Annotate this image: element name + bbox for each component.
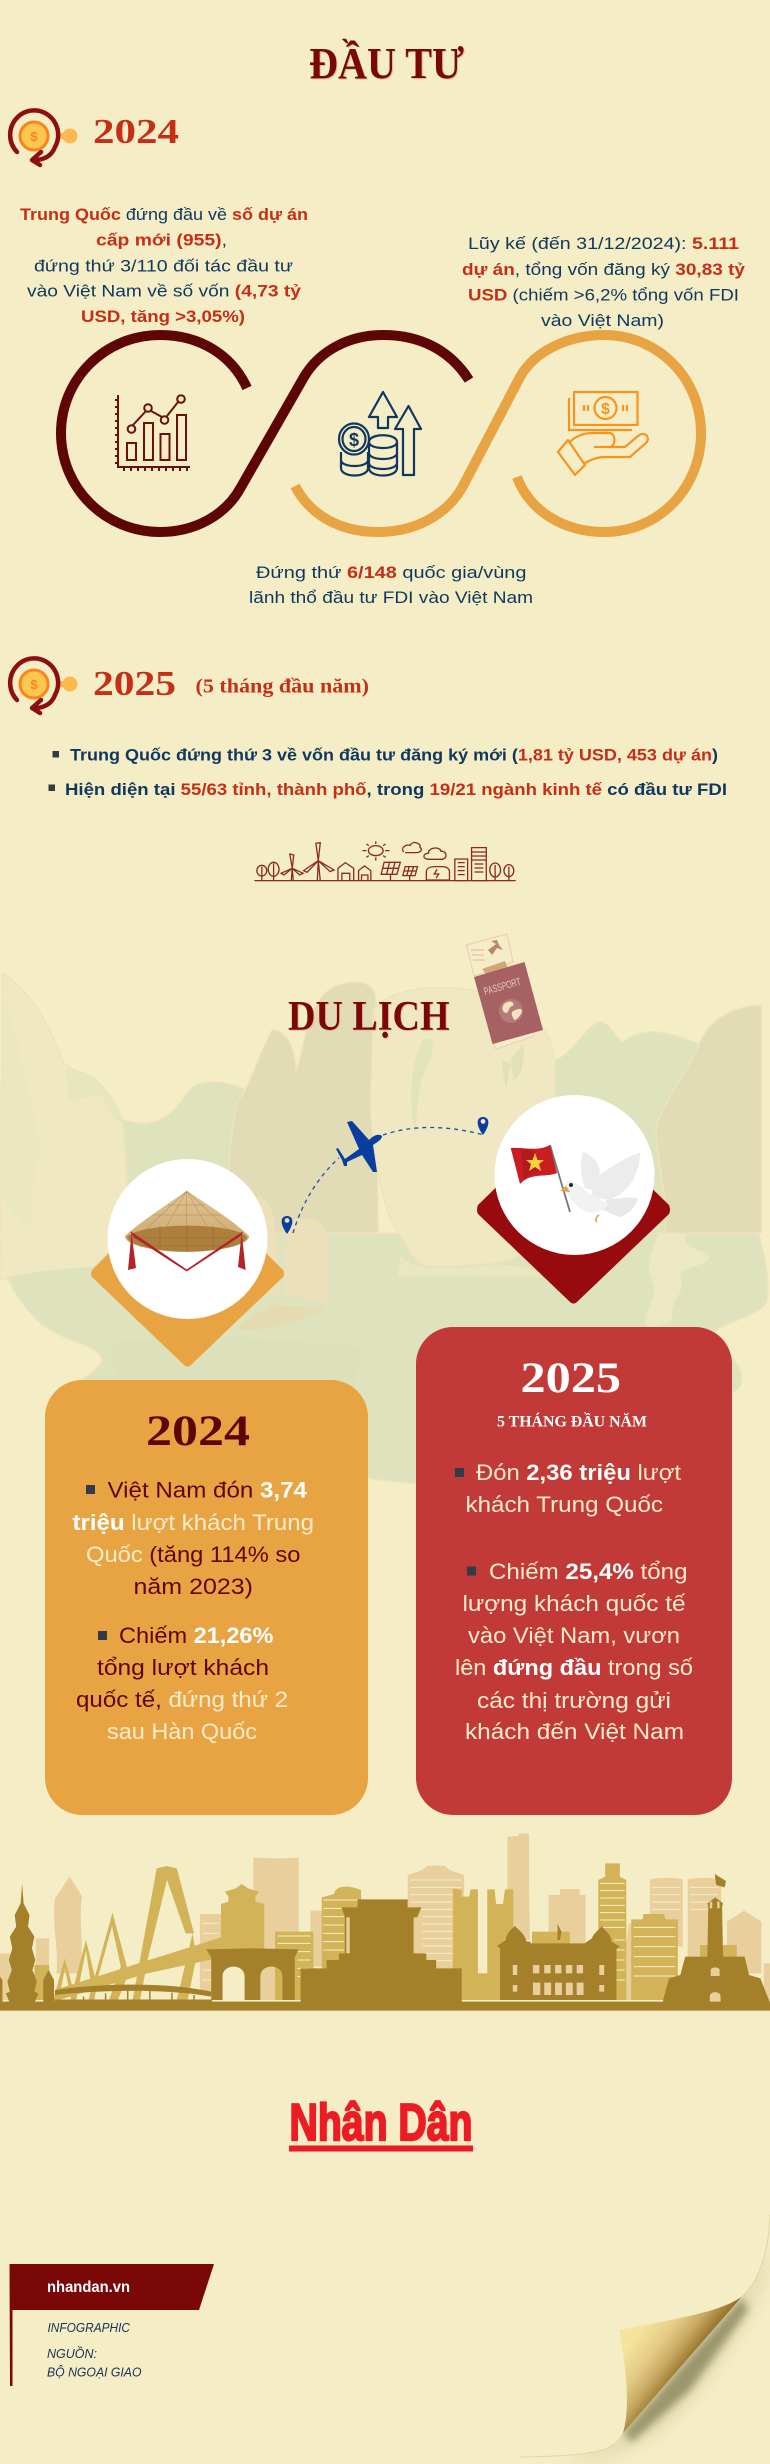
text: 3.74 million visitors: Quốc (tăng 114% so — [86, 1542, 300, 1567]
panel: 2024 tourism card — [45, 1380, 368, 1815]
icon: passport — [466, 934, 543, 1049]
bullet list: 2025 investment: Hiện diện tại 55/63 tỉnh, thành phố , trong 19/21 ngành kinh tế có đầu tư FDI — [65, 780, 727, 799]
text block: rank 6/148: lãnh thổ đầu tư FDI vào Việt Nam — [249, 588, 533, 607]
text block: cumulative investment: Lũy kế (đến 31/12/2024): 5.111 — [468, 234, 739, 253]
text block: China leads in new projects: Trung Quốc đứng đầu về số dự án — [20, 205, 308, 224]
page curl: shadow and gold fold — [480, 2200, 770, 2462]
map pin: red with flag and dove — [477, 1095, 670, 1304]
source label: BỘ NGOẠI GIAO — [47, 2364, 142, 2380]
text: 21.26% share: sau Hàn Quốc — [107, 1719, 257, 1744]
text block: rank 6/148: Đứng thứ 6/148 quốc gia/vùng — [256, 563, 526, 582]
website label: nhandan.vn — [47, 2279, 130, 2296]
window stripes — [202, 1880, 718, 1980]
icon: dove — [560, 1152, 640, 1222]
infinity ribbon: orange segment — [295, 335, 701, 532]
icon: coins and arrows: $ — [349, 430, 359, 450]
route: dashed flight path — [293, 1127, 484, 1233]
text: 2.36 million visitors: Đón 2,36 triệu lượt — [476, 1460, 681, 1485]
medium buildings — [34, 1855, 737, 2000]
text block: China leads in new projects: USD, tăng >3,05%) — [81, 307, 245, 326]
subheading: card first five months: 5 THÁNG ĐẦU NĂM — [497, 1412, 647, 1430]
subheading: first five months: (5 tháng đầu năm) — [196, 676, 369, 698]
heading: card 2024: 2024 — [146, 1408, 250, 1455]
text: 2.36 million visitors — [455, 1460, 681, 1517]
text: 25.4% share: lên đứng đầu trong số — [455, 1655, 693, 1680]
bullet list: 2025 investment — [48, 746, 727, 799]
light towers — [0, 1833, 770, 2000]
source label: NGUỒN: — [47, 2346, 97, 2361]
icon: coin cycle 2024 — [10, 110, 78, 165]
text: 21.26% share: Chiếm 21,26% — [119, 1623, 274, 1648]
text block: China leads in new projects: đứng thứ 3/110 đối tác đầu tư — [34, 256, 293, 276]
text block: cumulative investment: dự án , tổng vốn đăng ký 30,83 tỷ — [462, 260, 746, 279]
text: 25.4% share: vào Việt Nam, vươn — [468, 1623, 680, 1648]
icon: coin cycle 2024: $ — [30, 129, 38, 144]
title: ĐẦU TƯ: ĐẦU TƯ — [309, 38, 464, 88]
logo: Nhân Dân: Nhân Dân — [290, 2094, 472, 2152]
text: 25.4% share: khách đến Việt Nam — [465, 1719, 684, 1744]
icon: coin cycle 2025: $ — [30, 677, 38, 692]
icon: passport: PASSPORT — [483, 976, 523, 998]
icon: banknote on hand: $ — [601, 401, 610, 418]
dark landmarks — [0, 1874, 770, 2011]
title: DU LỊCH: DU LỊCH — [288, 994, 450, 1040]
icon: green city line art — [254, 841, 516, 881]
icon: airplane — [336, 1121, 382, 1172]
icon: banknote on hand — [558, 392, 648, 475]
panel: Ha Long Bay background — [0, 973, 768, 1483]
heading: 2025: 2025 — [93, 664, 176, 703]
text: 25.4% share: lượng khách quốc tế — [462, 1591, 686, 1616]
text block: cumulative investment — [462, 234, 746, 330]
landmark windows — [346, 1902, 721, 2002]
icon: Vietnam flag — [511, 1145, 570, 1212]
heading: card 2025: 2025 — [520, 1355, 621, 1402]
text: 21.26% share: quốc tế, đứng thứ 2 — [76, 1687, 288, 1712]
infinity ribbon: dark segment — [61, 335, 469, 532]
icon: coins and arrows — [339, 392, 421, 476]
icon: bar and line chart — [115, 395, 190, 471]
text: 25.4% share — [455, 1559, 693, 1744]
text: 21.26% share: tổng lượt khách — [97, 1655, 269, 1680]
text: 3.74 million visitors — [72, 1478, 314, 1599]
illustration: Hanoi skyline — [0, 1833, 770, 2011]
text: 25.4% share: Chiếm 25,4% tổng — [489, 1559, 687, 1584]
text: 3.74 million visitors: Việt Nam đón 3,74 — [108, 1478, 308, 1502]
text: 25.4% share: các thị trường gửi — [477, 1688, 671, 1713]
text: 3.74 million visitors: năm 2023) — [134, 1574, 253, 1599]
text: 3.74 million visitors: triệu lượt khách Trung — [72, 1510, 314, 1535]
heading: 2024: 2024 — [93, 112, 179, 151]
text block: rank 6/148 — [249, 563, 533, 607]
genre label: INFOGRAPHIC — [48, 2320, 131, 2335]
icon: location pin end — [478, 1117, 488, 1135]
source label — [47, 2346, 142, 2380]
text block: cumulative investment: USD (chiếm >6,2% tổng vốn FDI — [468, 286, 739, 304]
icon: location pin start — [282, 1216, 292, 1234]
bullet list: 2025 investment: Trung Quốc đứng thứ 3 về vốn đầu tư đăng ký mới ( 1,81 tỷ USD, 453 dự án ) — [70, 746, 718, 764]
text block: China leads in new projects: vào Việt Nam về số vốn (4,73 tỷ — [27, 282, 302, 300]
text: 2.36 million visitors: khách Trung Quốc — [466, 1492, 663, 1517]
icon: coin cycle 2025 — [10, 658, 78, 713]
footer: source banner — [10, 2264, 214, 2386]
stripes on medium buildings — [278, 1883, 675, 1980]
text block: cumulative investment: vào Việt Nam) — [541, 311, 664, 330]
text block: China leads in new projects: cấp mới (955) , — [96, 230, 227, 250]
text: 21.26% share — [76, 1623, 288, 1744]
text block: China leads in new projects — [20, 205, 308, 326]
icon: conical hat — [125, 1191, 249, 1271]
map pin: orange with conical hat — [91, 1159, 284, 1366]
panel: 2025 tourism card — [416, 1327, 732, 1815]
